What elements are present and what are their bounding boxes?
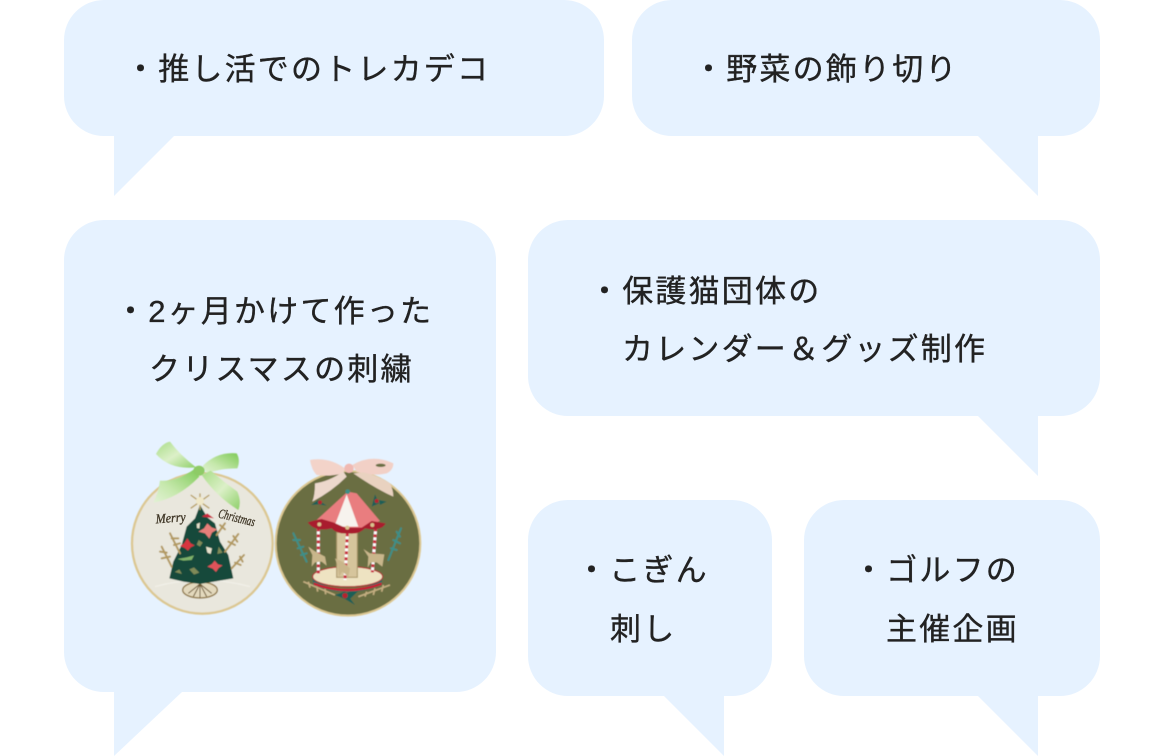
bubble: vegetable carving (632, 0, 1100, 196)
pink ribbon (310, 459, 393, 502)
bubble: trading card decoration: ・推し活でのトレカデコ (125, 52, 490, 87)
bubble: cat shelter calendar and goods: カレンダー＆グッズ制作 (622, 332, 987, 367)
platform (312, 567, 383, 592)
central pillar (337, 532, 357, 577)
gold branches (160, 523, 244, 568)
bubble: christmas embroidery: クリスマスの刺繍 (149, 352, 414, 387)
tree base (183, 582, 217, 598)
tree (169, 505, 233, 584)
reindeer (308, 547, 384, 577)
tree top star (191, 493, 209, 510)
bubble: golf event planning: 主催企画 (886, 612, 1019, 647)
bubble: christmas embroidery: ・2ヶ月かけて作った (115, 294, 433, 329)
tree ornaments (175, 513, 223, 575)
roof (308, 489, 386, 534)
illustration: carousel embroidery hoop (276, 459, 420, 616)
green ribbon (153, 442, 240, 510)
lettering: Merry (154, 509, 186, 526)
illustration: christmas tree embroidery hoop: Christmas (217, 506, 257, 529)
bubble: golf event planning: ・ゴルフの (853, 553, 1019, 588)
bubble: christmas embroidery (64, 220, 496, 756)
gold branches (303, 582, 390, 597)
striped poles (318, 528, 376, 580)
illustration: christmas tree embroidery hoop (132, 442, 273, 614)
bubble: kogin stitching (528, 500, 772, 756)
holly (311, 494, 387, 605)
bubble: golf event planning (804, 500, 1100, 756)
teal branches (293, 528, 401, 562)
bubble: cat shelter calendar and goods (528, 220, 1100, 476)
bubble: trading card decoration (64, 0, 604, 196)
bubble: kogin stitching: ・こぎん (576, 553, 709, 588)
bubble: cat shelter calendar and goods: ・保護猫団体の (589, 274, 821, 309)
bubble: kogin stitching: 刺し (610, 612, 676, 647)
bubble: vegetable carving: ・野菜の飾り切り (693, 52, 959, 87)
